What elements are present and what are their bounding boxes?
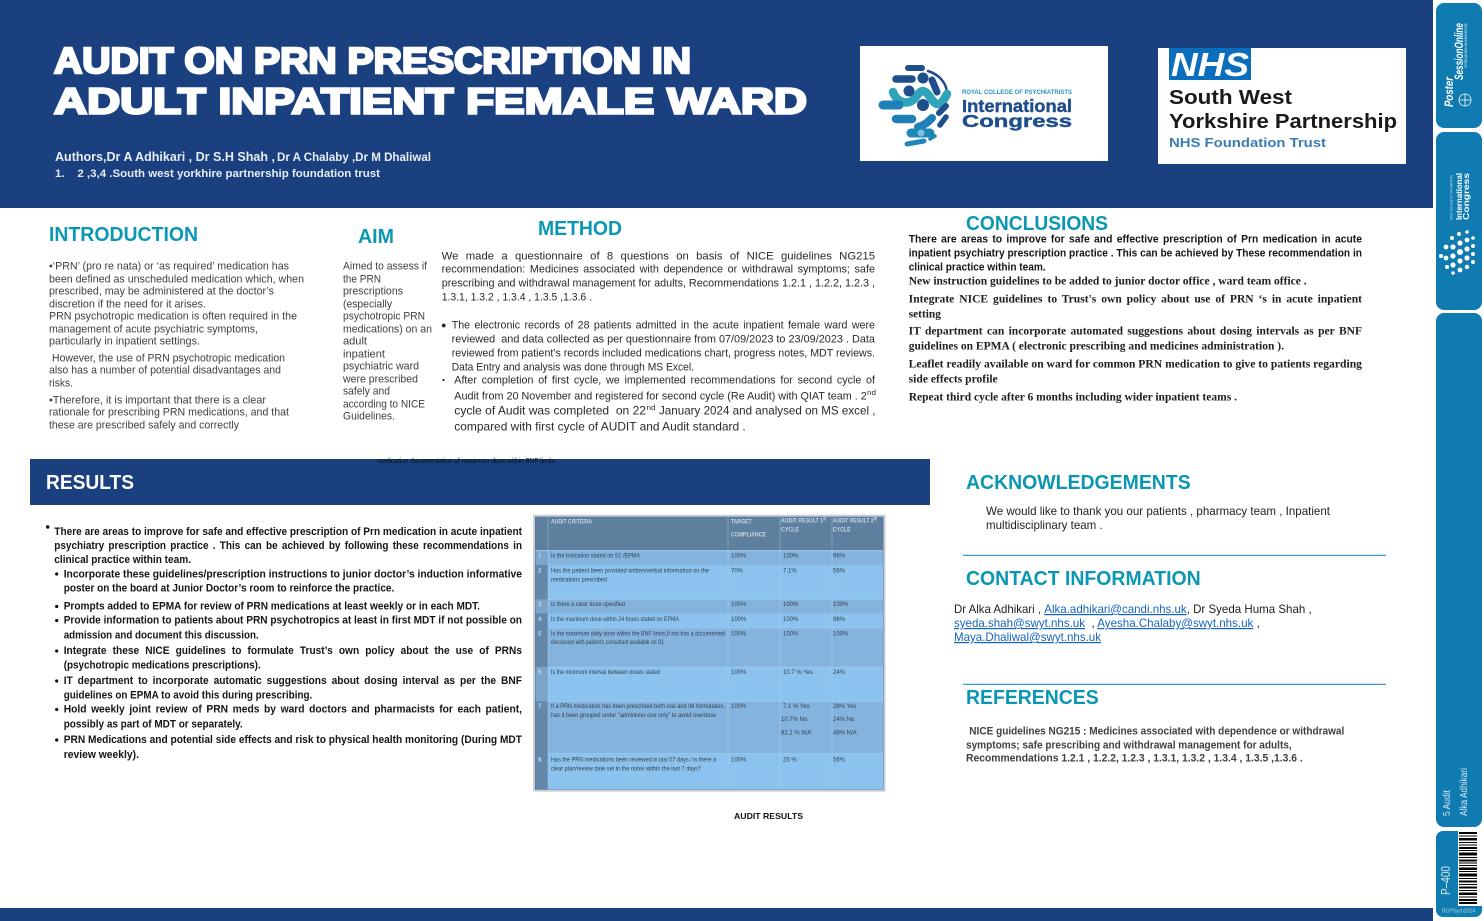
heading: acknowledgements: ACKNOWLEDGEMENTS [966,471,1191,494]
table first cycle values: 7.1 % Yes [783,704,810,710]
barcode [1458,831,1482,906]
table target compliance values: 100% [731,602,747,608]
table second cycle values: 96% [833,617,846,623]
list: recommendations [55,568,522,761]
table criteria text [551,554,725,773]
text block: conclusions summary: clinical practice within team. [909,262,1046,274]
panel: contact information [954,567,1312,644]
table second cycle values: 96% [833,554,846,560]
side tab: Poster Session Online: SPREADING KNOWLEDGE [1464,23,1468,68]
list: recommendations: poster on the board at Junior Doctor’s room to reinforce the practice. [64,583,394,595]
table target compliance values: 100% [731,704,747,710]
text block: method second bullet: January 2024 and analysed on MS excel , [659,403,876,417]
text block: references body: NICE guidelines NG215 : Medicines associated with dependence or withdrawal [969,726,1344,738]
text block: introduction body: •‘PRN’ (pro re nata) or ‘as required’ medication has [49,261,289,273]
table second cycle values: 24% [833,670,846,676]
table header text: CYCLE [833,527,851,533]
text block: introduction body: been defined as unscheduled medication which, when [49,273,304,285]
table second cycle values [833,554,857,764]
table target compliance values: 100% [731,554,747,560]
panel: results recommendations [46,525,522,761]
side tab: poster number and barcode: P–400 [1438,866,1453,895]
table second cycle values: 100% [833,602,849,608]
table second cycle values: 56% [833,568,846,574]
table row numbers: 2 [538,568,542,574]
table first cycle values: 10.7 % Yes [783,670,813,676]
table header [536,517,883,550]
title: ADULT INPATIENT FEMALE WARD [54,80,807,122]
text block: conclusions actions: Integrate NICE guidelines to Trust's own policy about use of PRN ‘s in acute inpatient [909,294,1362,306]
title [54,40,807,122]
text block: references body: symptoms; safe prescribing and withdrawal management for adults, [966,740,1292,752]
text block: aim body: the PRN [343,273,381,285]
text block: method second bullet: nd [867,388,876,397]
text block: introduction body: management of acute psychiatric symptoms, [49,323,258,335]
table target compliance values [731,554,747,764]
side tab: topic and author: Alka Adhikari [1459,768,1470,816]
panel: method [442,217,876,433]
table second cycle values: 24% No [833,717,855,723]
table criteria text: Has the PRN medications been reviewed in last 07 days / is there a [551,758,717,764]
title: AUDIT ON PRN PRESCRIPTION IN [54,40,691,81]
table first cycle values: 82.1 % N/A [781,731,811,737]
stray small text over results band: medication documentation of maximum dose within BNF limits [377,458,555,465]
logo: NHS South West Yorkshire Partnership: NHS Foundation Trust [1169,135,1327,150]
list: recommendations: admission and document this discussion. [64,630,259,642]
heading: method: METHOD [538,217,622,240]
text block: contact details: , [1092,616,1095,630]
side tab: topic and author: 5 Audit [1442,790,1453,816]
logo: Royal College of Psychiatrists International Congress [860,46,1108,161]
logo: NHS South West Yorkshire Partnership: Yorkshire Partnership [1169,110,1397,133]
authors and affiliation: 1. 2 ,3,4 .South west yorkhire partnership foundation trust [55,168,380,180]
panel: conclusions [909,212,1362,404]
text block: introduction body: particularly in inpatient settings. [49,336,200,348]
text block: aim body: (especially [343,299,393,311]
list: recommendations: Integrate these NICE guidelines to formulate Trust’s own policy about the use of PRNs [64,645,522,657]
text block: results summary [46,525,522,566]
panel: references [966,686,1344,765]
side tab: International Congress: Congress [1461,173,1471,220]
text block: introduction body: these are prescribed safely and correctly [49,420,240,432]
table second cycle values: 28% Yes [833,704,856,710]
table row numbers: 7 [538,704,542,710]
table row numbers [538,554,542,764]
text block: introduction body: also has a number of potential disadvantages and [49,365,281,377]
text block: introduction body [49,261,304,432]
text block: method second bullet: nd [646,403,656,412]
text block: conclusions actions: Repeat third cycle after 6 months including wider inpatient teams . [909,392,1237,404]
table criteria text: Has the patient been provided written/verbal information on the [551,568,710,574]
text block: conclusions summary [909,234,1362,274]
results band heading [30,459,930,505]
text block: contact details: Alka.adhikari@candi.nhs.uk [1044,602,1188,616]
table criteria text: discussion with patient's consultant available on S1 [551,640,665,646]
text block: introduction body: •Therefore, it is important that there is a clear [49,395,266,407]
text block: conclusions actions: New instruction guidelines to be added to junior doctor office , ward team office . [909,276,1307,288]
text block: method first bullet: reviewed from patient’s records included medications chart, progress notes, MDT reviews. [452,348,875,360]
table target compliance values: 100% [731,617,747,623]
icon: globe [1459,94,1471,106]
text block: method intro: recommendation: Medicines associated with dependence or withdrawal symptoms; safe [442,264,875,276]
table target compliance values: 70% [731,568,744,574]
text block: acknowledgements body: We would like to thank you our patients , pharmacy team , Inpatient [986,504,1331,518]
table row numbers: 8 [538,758,542,764]
panel: acknowledgements [966,471,1331,532]
table header text [551,517,877,539]
text block: references body: Recommendations 1.2.1 , 1.2.2, 1.2.3 , 1.3.1, 1.3.2 , 1.3.4 , 1.3.5 ,1.3.6 . [966,753,1303,765]
text block: introduction body: discretion if the need for it arises. [49,299,206,311]
text block: introduction body: PRN psychotropic medication is often required in the [49,311,297,323]
icon: network brain globe [883,68,947,144]
table second cycle values: 100% [833,631,849,637]
table row numbers: 6 [538,670,542,676]
side tab: poster number and barcode [1436,831,1482,917]
text block: aim body: medications) on an [343,323,432,335]
table first cycle values: 100% [783,602,799,608]
logo: NHS South West Yorkshire Partnership [1158,46,1406,164]
text block: conclusions actions: IT department can incorporate automated suggestions about dosing intervals as per BNF [909,326,1362,338]
table first cycle values [781,554,813,764]
heading: contact information: CONTACT INFORMATION [966,567,1201,590]
logo: Royal College of Psychiatrists International Congress: International [962,96,1072,116]
text block: contact details: Maya.Dhaliwal@swyt.nhs.uk [954,630,1102,644]
text block: method first bullet: reviewed and data collected as per questionnaire from 07/09/2023 to 23/09/2023 . Data [452,334,875,346]
table header text: AUDIT CRITERIA [551,519,593,525]
text block: method second bullet [442,375,876,433]
text block: contact details: , [1256,616,1260,630]
list: recommendations: Prompts added to EPMA for review of PRN medications at least weekly or in each MDT. [64,601,480,613]
text block: aim body: safely and [343,386,390,398]
logo: NHS South West Yorkshire Partnership: South West [1169,86,1292,109]
side tab: Poster Session Online [1436,3,1482,128]
table header text: COMPLIANCE [731,533,766,539]
text block: introduction body: However, the use of PRN psychotropic medication [52,353,285,365]
table header text: AUDIT RESULT 2 [833,519,874,525]
table first cycle values: 100% [783,617,799,623]
text block: aim body: prescriptions [343,286,403,298]
text block: method first bullet: Data Entry and analysis was done through MS Excel. [452,362,694,374]
icon: network globe [1439,230,1475,275]
text block: aim body: Aimed to assess if [343,261,427,273]
text block: introduction body: rationale for prescribing PRN medications, and that [49,407,289,419]
text block: aim body: were prescribed [342,374,418,386]
table row numbers: 3 [538,602,542,608]
text block: method second bullet: After completion of first cycle, we implemented recommendations for second cycle of [454,375,876,387]
table first cycle values: 100% [783,631,799,637]
side tab: Poster Session Online: Poster [1444,77,1456,107]
text block: conclusions actions [909,276,1362,404]
table criteria text: Is there a clear dose specified [551,602,625,608]
text block: contact details: Dr Alka Adhikari , [954,602,1041,616]
list: recommendations: guidelines on EPMA to avoid this during prescribing. [64,690,312,702]
text block: conclusions actions: Leaflet readily available on ward for common PRN medication to give to patients regarding [909,359,1362,371]
table row numbers: 5 [538,631,542,637]
table criteria text: Is the maximum daily dose within the BNF limits,if not has a documented [551,631,725,637]
table header text: TARGET [731,519,752,525]
text block: introduction body: prescribed, may be administered at the doctor’s [49,286,274,298]
list: recommendations: possibly as part of MDT or separately. [64,719,243,731]
panel: aim [342,225,432,423]
text block: method intro [442,250,875,304]
text block: aim body: Guidelines. [343,411,395,423]
logo: Royal College of Psychiatrists International Congress: Congress [962,111,1072,131]
list: recommendations: Hold weekly joint review of PRN meds by ward doctors and pharmacists for each patient, [64,704,522,716]
table: audit results [533,515,886,792]
text block: conclusions actions: side effects profile [909,374,998,386]
text block: aim body: psychiatric ward [343,361,419,373]
text block: method second bullet: cycle of Audit was completed on 22 [454,403,646,417]
text block: references body [966,726,1344,765]
list: recommendations: (psychotropic medications prescriptions). [64,660,261,672]
logo: Royal College of Psychiatrists International Congress: ROYAL COLLEGE OF PSYCHIATRISTS [962,89,1073,96]
side tab: International Congress: International [1454,173,1464,220]
text block: conclusions summary: There are areas to improve for safe and effective prescription of Prn medication in acute [909,234,1362,246]
side tab: topic and author [1436,313,1482,827]
table criteria text: clear plan/review date set in the notes within the last 7 days? [551,767,702,773]
side tab: International Congress [1436,132,1482,310]
text block: results summary: There are areas to improve for safe and effective prescription of Prn medication in acute inpatient [54,526,522,538]
text block: aim body: psychotropic PRN [343,311,425,323]
heading: introduction: INTRODUCTION [49,223,198,246]
list: recommendations: PRN Medications and potential side effects and risk to physical health monitoring (During MDT [64,734,522,746]
text block: method second bullet: Audit from 20 November and registered for second cycle (Re Audit) with QIAT team . 2 [454,390,867,402]
heading: conclusions: CONCLUSIONS [966,212,1108,235]
table row numbers: 4 [538,617,542,623]
text block: method intro: 1.3.1, 1.3.2 , 1.3.4 , 1.3.5 ,1.3.6 . [442,292,592,304]
table criteria text: Is the maximum dose within 24 hours stated on EPMA [551,617,679,623]
table criteria text: Is the minimum interval between doses stated [551,670,660,676]
table second cycle values: 48% N/A [833,731,857,737]
table target compliance values: 100% [731,758,747,764]
text block: introduction body: risks. [49,378,73,390]
table header text: AUDIT RESULT 1 [781,519,824,525]
logo: NHS South West Yorkshire Partnership: NHS [1171,46,1249,83]
table first cycle values: 10.7% No [781,717,808,723]
table header text: st [823,517,826,523]
side tab: International Congress: ROYAL COLLEGE OF PSYCHIATRISTS [1450,175,1454,220]
table first cycle values: 25 % [783,758,797,764]
authors and affiliation: Dr A Chalaby ,Dr M Dhaliwal [277,152,431,164]
table caption: AUDIT RESULTS [734,811,803,821]
text block: conclusions summary: inpatient psychiatry prescription practice . This can be achieved by These recommendation in [909,248,1362,260]
text block: contact details: Ayesha.Chalaby@swyt.nhs.uk [1097,616,1254,630]
header band [0,0,1433,208]
table first cycle values: 100% [783,554,799,560]
text block: results summary: clinical practice within team. [54,554,191,566]
text block: results summary: psychiatry prescription practice . This can be achieved by following these recommendations in [54,540,522,552]
text block: contact details [954,602,1312,644]
table criteria text: medications prescribed [551,577,607,583]
bottom band [0,908,1433,921]
list: recommendations: Provide information to patients about PRN psychotropics at least in first MDT if not possible on [64,615,522,627]
text block: aim body: inpatient [343,348,385,360]
text block: method first bullet [442,320,875,374]
table criteria text: Is the Indication stated on S1 /EPMA [551,554,640,560]
list: recommendations: review weekly). [64,749,139,761]
results band heading: RESULTS [46,472,134,494]
authors and affiliation [55,150,431,180]
table: audit results: nd [874,517,877,523]
table rows [548,551,883,565]
table target compliance values: 100% [731,670,747,676]
text block: aim body [342,261,432,423]
heading: aim: AIM [358,225,394,248]
text block: acknowledgements body: multidisciplinary team . [986,518,1103,532]
list: recommendations: Incorporate these guidelines/prescription instructions to junior doctor’s induction informative [64,568,522,580]
text block: method second bullet: compared with first cycle of AUDIT and Audit standard . [454,419,746,433]
text block: aim body: according to NICE [343,399,425,411]
side tab: poster number and barcode: RCPSych2024 [1442,909,1475,915]
table second cycle values: 56% [833,758,846,764]
text block: contact details: syeda.shah@swyt.nhs.uk [954,616,1086,630]
list: recommendations: IT department to incorporate automatic suggestions about dosing interval as per the BNF [64,675,522,687]
text block: acknowledgements body [986,504,1331,532]
table header text: CYCLE [781,527,799,533]
text block: method intro: prescribing and withdrawal management for adults, Recommendations 1.2.1 , 1.2.2, 1.2.3 , [442,278,875,290]
text block: method first bullet: The electronic records of 28 patients admitted in the acute inpatient female ward were [452,320,875,332]
table row numbers: 1 [538,554,542,560]
panel: introduction [49,223,304,432]
text block: contact details: , Dr Syeda Huma Shah , [1187,602,1312,616]
table first cycle values: 7.1% [783,568,797,574]
text block: conclusions actions: guidelines on EPMA ( electronic prescribing and medicines administration ). [909,341,1284,353]
text block: method intro: We made a questionnaire of 8 questions on basis of NICE guidelines NG215 [442,250,875,262]
text block: conclusions actions: setting [909,309,941,321]
heading: references: REFERENCES [966,686,1099,709]
table criteria text: has it been grouped under "administer one only" to avoid overdose [551,713,717,719]
table target compliance values: 100% [731,631,747,637]
authors and affiliation: Authors,Dr A Adhikari , Dr S.H Shah , [55,150,275,164]
text block: aim body: adult [343,336,367,348]
table criteria text: If a PRN medication has been prescribed both oral and IM formulation, [551,704,725,710]
